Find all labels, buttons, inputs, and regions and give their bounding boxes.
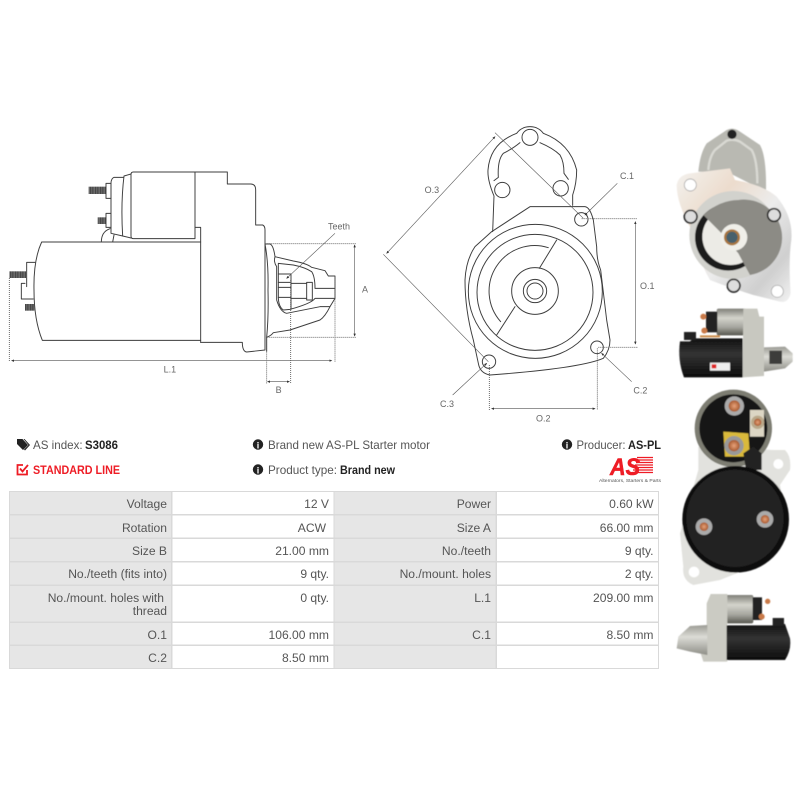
- photo: side view mirrored: [677, 594, 790, 662]
- row: C.2: C.2: [148, 651, 167, 665]
- row: threaded holes and L.1: L.1: [474, 591, 491, 605]
- callout C.3: [440, 363, 487, 409]
- drive end rings and hub: [468, 224, 602, 358]
- icon: info: i: [566, 440, 568, 450]
- icon: checkbox: [18, 465, 28, 474]
- brand new note: Brand new AS-PL Starter motor: [268, 439, 430, 452]
- product type: [253, 464, 396, 477]
- row: rotation and size A: [10, 516, 658, 538]
- row: teeth fits into and mounting holes: No./teeth (fits into): [68, 567, 167, 581]
- AS index: [17, 439, 119, 452]
- row: teeth fits into and mounting holes: 9 qty.: [300, 567, 329, 581]
- AS index: S3086: [85, 439, 119, 452]
- dimension A: A: [362, 285, 368, 295]
- AS index: AS index:: [33, 439, 83, 452]
- row: size B and teeth: 9 qty.: [625, 544, 654, 558]
- dimension L.1: L.1: [164, 365, 176, 375]
- AS-PL logo: Alternators, Starters & Parts: [599, 478, 662, 484]
- specification table: [9, 491, 659, 669]
- product type: Product type:: [268, 464, 337, 477]
- row: O.1 and C.1: [10, 623, 658, 644]
- producer: Producer:: [576, 439, 626, 452]
- row: voltage and power: 12 V: [304, 497, 330, 511]
- row: rotation and size A: Rotation: [122, 521, 167, 535]
- row: O.1 and C.1: 106.00 mm: [268, 628, 329, 642]
- icon: info: i: [257, 466, 259, 476]
- photo: front end view: [677, 129, 792, 302]
- photo: side view with black motor: [679, 309, 793, 377]
- icon: info: [253, 439, 263, 450]
- dimension B: B: [276, 385, 282, 395]
- row: rotation and size A: ACW: [298, 521, 327, 535]
- row: O.1 and C.1: C.1: [472, 628, 491, 642]
- flange outline: [465, 127, 610, 375]
- producer: [562, 439, 661, 452]
- row: size B and teeth: 21.00 mm: [275, 544, 329, 558]
- standard line badge: STANDARD LINE: [33, 465, 120, 477]
- row: threaded holes and L.1: No./mount. holes with: [48, 591, 164, 605]
- row: threaded holes and L.1: thread: [133, 604, 167, 618]
- icon: info: i: [257, 440, 259, 450]
- front view technical drawing: [383, 127, 654, 424]
- dimension L.1: [9, 277, 335, 375]
- dimension O.2: [489, 348, 597, 424]
- teeth callout: [287, 222, 350, 278]
- side view technical drawing: [9, 172, 368, 395]
- row: voltage and power: Power: [457, 497, 491, 511]
- row: threaded holes and L.1: 0 qty.: [300, 591, 329, 605]
- row: size B and teeth: No./teeth: [442, 544, 491, 558]
- row: threaded holes and L.1: [10, 586, 658, 622]
- dimension O.1: [582, 219, 654, 347]
- row: size B and teeth: [10, 539, 658, 561]
- row: voltage and power: 0.60 kW: [609, 497, 654, 511]
- row: C.2: [10, 646, 658, 668]
- row: teeth fits into and mounting holes: No./mount. holes: [400, 567, 491, 581]
- row: rotation and size A: 66.00 mm: [600, 521, 654, 535]
- row: O.1 and C.1: 8.50 mm: [606, 628, 654, 642]
- callout C.3: C.3: [440, 399, 454, 409]
- callout C.2: C.2: [633, 386, 647, 396]
- row: rotation and size A: Size A: [457, 521, 492, 535]
- photo: rear view with black cap: [680, 390, 790, 585]
- teeth callout: Teeth: [328, 222, 350, 232]
- row: C.2: 8.50 mm: [282, 651, 329, 665]
- callout C.1: [585, 171, 634, 215]
- row: teeth fits into and mounting holes: [10, 562, 658, 584]
- callout C.2: [602, 353, 647, 396]
- AS-PL logo: [599, 454, 662, 484]
- AS-PL logo: AS: [609, 454, 640, 481]
- row: voltage and power: Voltage: [127, 497, 167, 511]
- dimension O.1: O.1: [640, 281, 654, 291]
- dimension O.3: O.3: [425, 185, 439, 195]
- icon: info: [253, 464, 263, 476]
- row: voltage and power: [10, 492, 658, 514]
- starter motor side outline: [9, 172, 335, 352]
- dimension O.2: O.2: [536, 414, 550, 424]
- row: size B and teeth: Size B: [132, 544, 167, 558]
- product type: Brand new: [340, 464, 396, 477]
- dimension O.3: [383, 133, 583, 362]
- icon: tags: [17, 439, 30, 450]
- dimension A: [267, 244, 368, 337]
- callout C.1: C.1: [620, 171, 634, 181]
- row: threaded holes and L.1: 209.00 mm: [593, 591, 654, 605]
- dimension B: [267, 280, 291, 395]
- row: teeth fits into and mounting holes: 2 qty.: [625, 567, 654, 581]
- row: O.1 and C.1: O.1: [148, 628, 167, 642]
- producer: AS-PL: [628, 439, 661, 452]
